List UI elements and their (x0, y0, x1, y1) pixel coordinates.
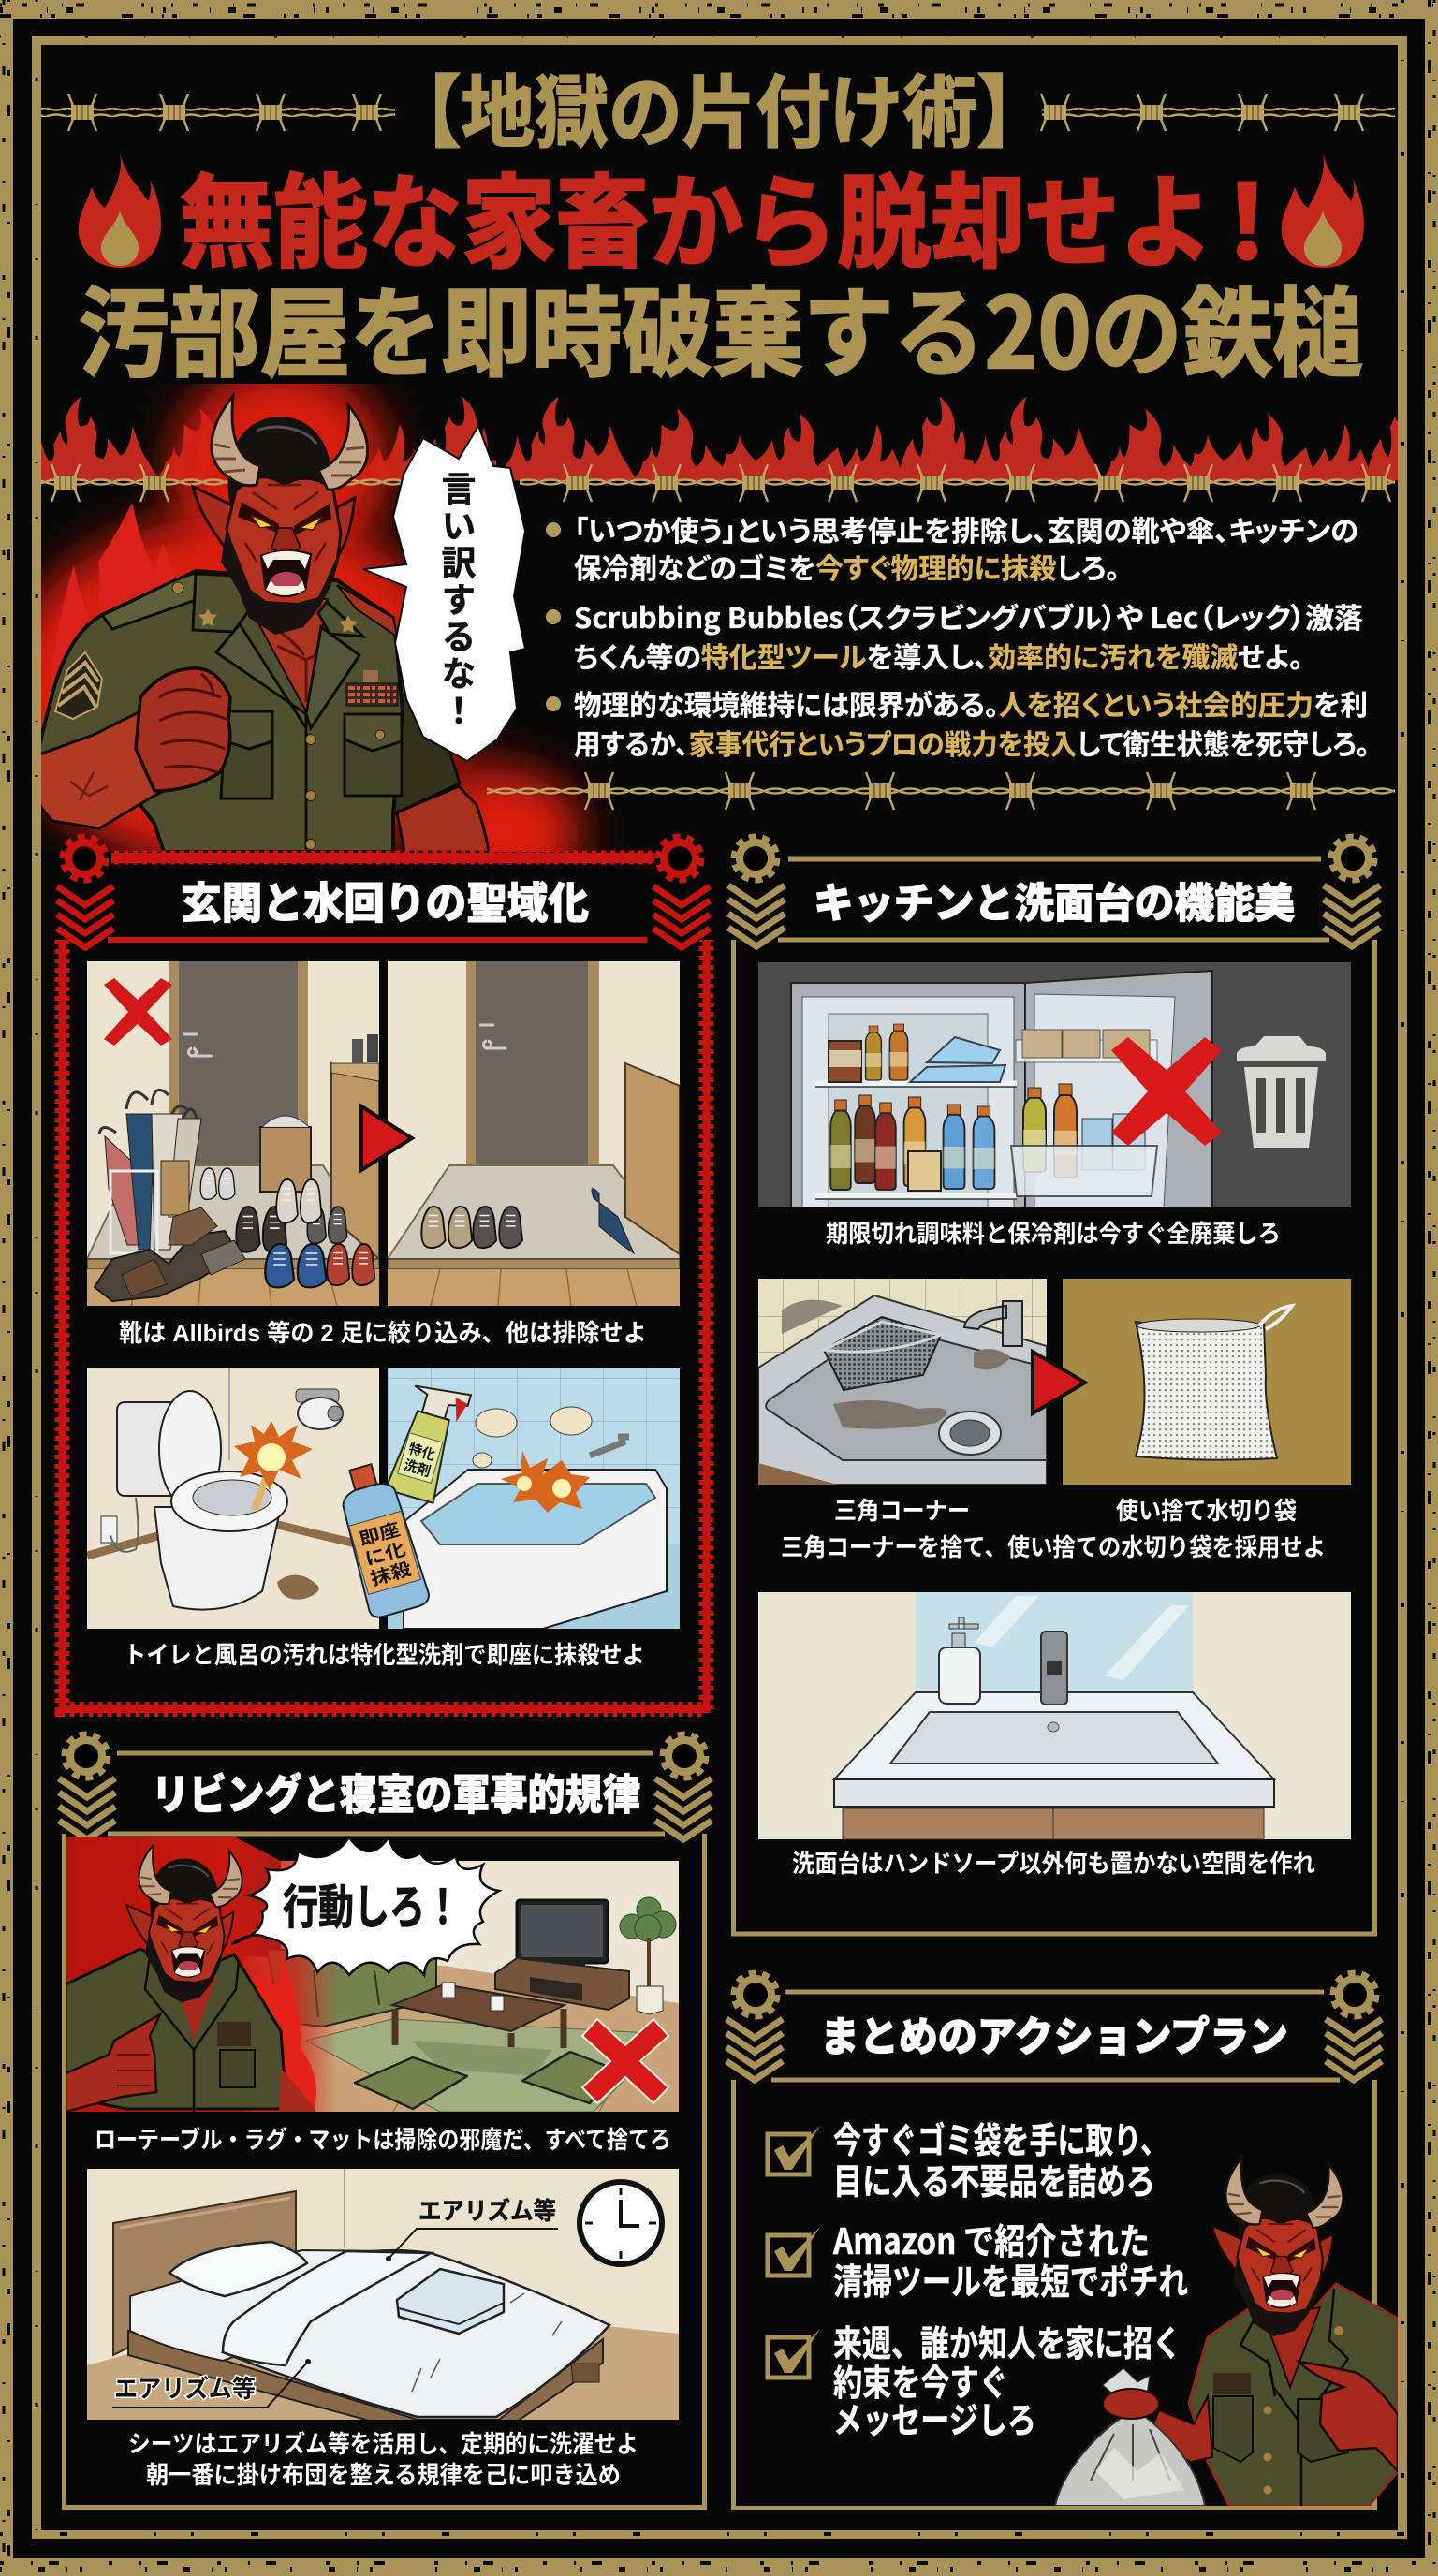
garbage bag (1055, 2368, 1205, 2506)
arrow: before to after (361, 1106, 412, 1170)
image: cluttered entrance (87, 961, 379, 1306)
callout: airism upper: エアリズム等 (418, 2192, 556, 2227)
checklist item 1: 今すぐゴミ袋を手に取り、 (833, 2112, 1168, 2163)
speech bubble: action: 行動しろ！ (283, 1870, 461, 1938)
devil head (126, 1845, 242, 2002)
icon: detergent bottle: 即座 (357, 1519, 403, 1550)
icon: spray bottle (386, 1380, 471, 1505)
bullet 1: 「いつか使う」という思考停止を排除し、玄関の靴や傘、キッチンの (574, 508, 1358, 549)
gold frame (64, 1753, 704, 2507)
heading: まとめのアクションプラン (820, 2003, 1288, 2063)
devil head (1211, 2158, 1343, 2336)
red x (582, 2019, 668, 2103)
devil pointing hand (1299, 2362, 1398, 2471)
title block (41, 51, 1395, 396)
caption: shoes: 靴は Allbirds 等の 2 足に絞り込み、他は排除せよ (119, 1319, 647, 1347)
umbrellas (99, 1090, 197, 1134)
intro bullet list (546, 508, 1370, 763)
title red line: 無能な家畜から脱却せよ (180, 142, 1213, 288)
image: living room with devil (66, 1837, 679, 2112)
image: clean washstand (758, 1592, 1351, 1839)
flame band (28, 396, 1438, 480)
medals (346, 670, 398, 706)
icon: hand soap (939, 1617, 980, 1704)
icon: right flame (1282, 153, 1364, 268)
icon: left flame (79, 153, 161, 268)
bullet 3: 物理的な環境維持には限界がある。人を招くという社会的圧力を利 (574, 682, 1368, 724)
image: tidy entrance (388, 961, 680, 1306)
icon: detergent bottle (330, 1458, 432, 1619)
barbed wire left (41, 94, 395, 131)
bullet 2: Scrubbing Bubbles（スクラビングバブル）や Lec（レック）激落 (574, 595, 1363, 637)
caption: sheets: シーツはエアリズム等を活用し、定期的に洗濯せよ (128, 2430, 638, 2458)
devil fist on bag (1103, 2389, 1159, 2419)
caption: washstand: 洗面台はハンドソープ以外何も置かない空間を作れ (792, 1850, 1315, 1878)
image: fridge (758, 962, 1351, 1208)
callout: airism upper (386, 2192, 558, 2261)
icon: spray bottle: 洗剤 (402, 1456, 433, 1480)
icon: faucet (1041, 1632, 1067, 1705)
header gears and chevrons (59, 1735, 712, 1839)
heading: 玄関と水回りの聖域化 (181, 870, 589, 931)
caption: living room: ローテーブル・ラグ・マットは掃除の邪魔だ、すべて捨てろ (95, 2126, 671, 2154)
devil arm holding bag (1153, 2396, 1212, 2462)
panel: kitchen and washstand (728, 838, 1380, 1934)
panel: action plan (726, 1974, 1398, 2509)
red stamped frame (62, 856, 706, 1709)
devil scene background (66, 1837, 338, 2112)
barbed wire divider (520, 464, 1395, 502)
bullet 1 (546, 508, 1358, 587)
background flames (49, 503, 176, 699)
speech bubble: 言い訳するな: 言い訳するな！ (433, 471, 484, 730)
bullet 2: ちくん等の特化型ツールを導入し、効率的に汚れを殲滅せよ。 (574, 635, 1303, 676)
barbed wire behind devil (41, 464, 402, 502)
caption: toilet and bath: トイレと風呂の汚れは特化型洗剤で即座に抹殺せよ (124, 1641, 645, 1669)
callout: airism lower (112, 2359, 311, 2408)
image: bath (388, 1368, 680, 1629)
red x (104, 978, 172, 1046)
header gears and chevrons (726, 1974, 1382, 2080)
checklist item 3: メッセージしろ (833, 2392, 1036, 2443)
header gears and chevrons (57, 838, 710, 947)
icon: clock (580, 2182, 662, 2264)
label: triangle corner: 三角コーナー (834, 1497, 970, 1525)
title red line: ！ (1196, 142, 1298, 288)
checklist item 2: 清掃ツールを最短でポチれ (833, 2253, 1188, 2305)
bullet 2 (546, 595, 1363, 676)
panel: drain bag (1063, 1279, 1351, 1485)
speech bubble: action (231, 1837, 499, 1975)
bullet 3: 用するか、家事代行というプロの戦力を投入して衛生状態を死守しろ。 (574, 722, 1370, 763)
bullet 1: 保冷剤などのゴミを今すぐ物理的に抹殺しろ。 (574, 546, 1120, 587)
image: sink with corner basket (758, 1279, 1047, 1485)
barbed wire right (1041, 94, 1395, 131)
speech bubble: 言い訳するな (363, 426, 525, 761)
red x (1111, 1037, 1222, 1146)
icon: spray bottle: 特化 (406, 1441, 437, 1464)
caption: futon discipline: 朝一番に掛け布団を整える規律を己に叩き込め (146, 2461, 621, 2489)
checklist item 3: 約束を今すぐ (833, 2354, 1008, 2406)
caption: expired seasoning: 期限切れ調味料と保冷剤は今すぐ全廃棄しろ (826, 1220, 1281, 1248)
heading: リビングと寝室の軍事的規律 (152, 1761, 640, 1822)
icon: trash can (1237, 1036, 1326, 1148)
gold frame (734, 1992, 1374, 2509)
image: bedroom (87, 2169, 679, 2434)
title bracket line: 【地獄の片付け術】 (388, 51, 1050, 164)
checklist item 3: 来週、誰か知人を家に招く (833, 2315, 1181, 2366)
arrow: corner to bag (1033, 1352, 1085, 1413)
icon: detergent bottle: 抹殺 (368, 1559, 414, 1590)
devil glow (41, 384, 614, 852)
checklist item 1 (768, 2112, 1168, 2204)
image: toilet (87, 1368, 379, 1629)
devil uniform (34, 571, 489, 852)
heading: キッチンと洗面台の機能美 (814, 870, 1295, 929)
panel: living and bedroom (59, 1735, 712, 2507)
devil body (66, 1949, 316, 2112)
barbed wire lower divider (487, 772, 1395, 810)
bullet 3 (546, 682, 1370, 763)
devil fist and forearm (31, 668, 230, 828)
shoes (200, 1168, 235, 1199)
checklist item 3 (768, 2315, 1181, 2443)
panel: entrance and water area (57, 838, 710, 1709)
checklist item 1: 目に入る不要品を詰めろ (833, 2153, 1155, 2204)
title gold line: 汚部屋を即時破棄する20の鉄槌 (79, 255, 1363, 396)
header gears and chevrons (728, 838, 1380, 946)
caption: drain bag: 三角コーナーを捨て、使い捨ての水切り袋を採用せよ (781, 1533, 1326, 1561)
big devil character (41, 384, 614, 852)
sleeve chevron patch (55, 652, 102, 719)
devil uniform (1189, 2284, 1398, 2506)
devil with garbage bag (1055, 2158, 1398, 2506)
callout: airism lower: エアリズム等 (114, 2370, 256, 2405)
devil head (193, 396, 368, 635)
clutter pile (95, 1231, 239, 1301)
label: drain bag: 使い捨て水切り袋 (1116, 1497, 1297, 1525)
gold frame (734, 859, 1374, 1934)
checklist item 2: Amazon で紹介された (832, 2213, 1150, 2264)
icon: detergent bottle: に化 (362, 1539, 408, 1570)
checklist item 2 (768, 2213, 1188, 2305)
